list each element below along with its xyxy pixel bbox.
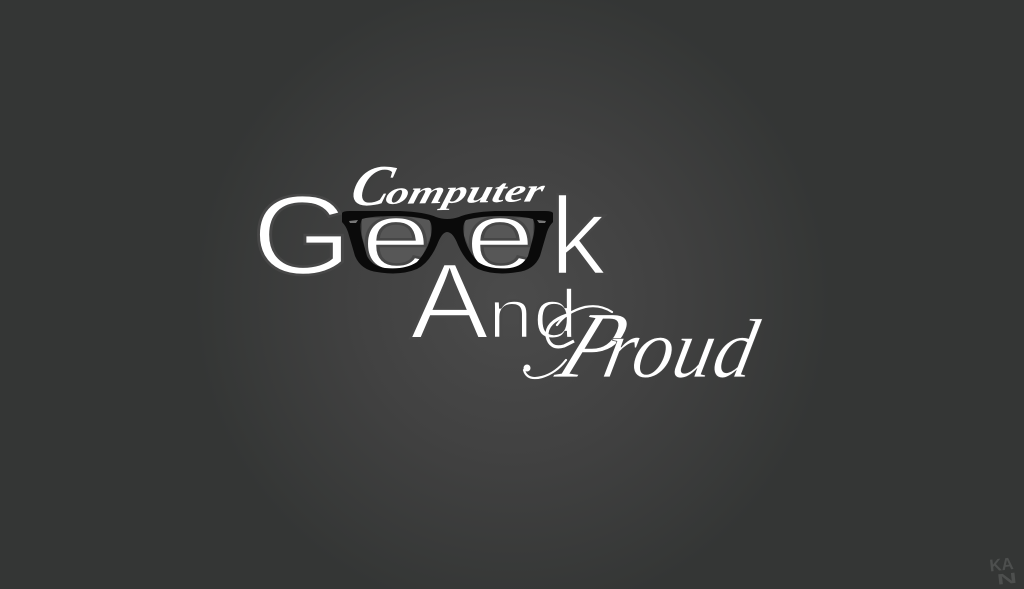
flourish bowl under nd bbox=[547, 315, 574, 347]
script lowercase omputer: omputer bbox=[382, 173, 550, 212]
watermark signature bbox=[989, 554, 1018, 589]
lens tint bbox=[362, 217, 533, 268]
first letter e: e bbox=[361, 181, 431, 291]
script lowercase roud: roud bbox=[596, 303, 766, 396]
script capital P: P bbox=[543, 292, 645, 398]
glasses rivets bbox=[349, 220, 546, 223]
script capital C: C bbox=[344, 153, 402, 218]
signature bottom line: N bbox=[996, 570, 1018, 589]
heading word: Geek bbox=[252, 172, 607, 298]
letter G: G bbox=[252, 172, 352, 298]
flourish terminal dot bbox=[524, 364, 530, 372]
word: And bbox=[410, 240, 578, 361]
letter A: A bbox=[410, 240, 489, 361]
heading word: Computer bbox=[344, 153, 550, 218]
second letter e: e bbox=[465, 181, 535, 291]
letter k: k bbox=[550, 175, 607, 298]
letters nd: nd bbox=[488, 275, 578, 353]
word: Proud bbox=[524, 292, 766, 398]
signature top line: KA bbox=[989, 554, 1014, 575]
icon: black glasses bbox=[342, 211, 553, 273]
script flourish on P bbox=[524, 306, 612, 378]
